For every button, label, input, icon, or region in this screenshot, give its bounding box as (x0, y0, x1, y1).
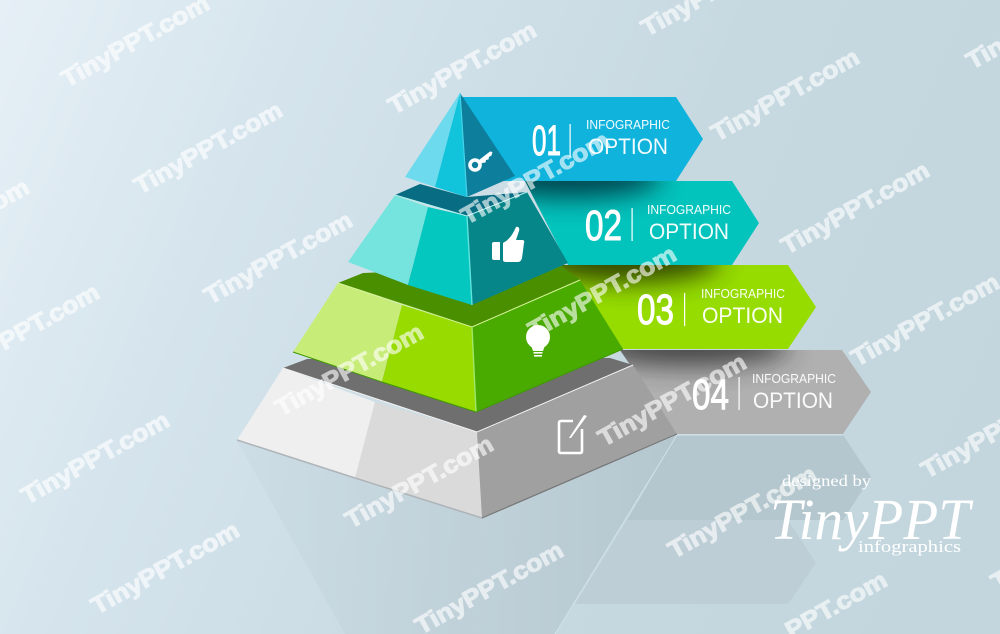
ribbon 4: 04 (692, 371, 729, 419)
ribbon 4: INFOGRAPHIC (752, 372, 836, 386)
icon: light bulb (526, 325, 550, 357)
ribbon 1: 01 (532, 117, 561, 165)
watermarks: TinyPPT.com (271, 319, 428, 422)
designer signature: designed by (782, 473, 871, 490)
watermarks: TinyPPT.com (847, 269, 1000, 372)
ribbon 4 (620, 350, 871, 434)
pyramid tier 2: teal (348, 184, 568, 305)
ribbon 1: OPTION (588, 134, 668, 159)
watermarks: TinyPPT.com (57, 0, 214, 93)
ribbon 3: OPTION (702, 303, 783, 328)
watermarks: TinyPPT.com (594, 349, 751, 452)
watermarks: TinyPPT.com (384, 17, 541, 120)
watermarks: TinyPPT.com (17, 407, 174, 510)
ribbon 1 (462, 97, 703, 181)
pyramid tier 1: blue top (405, 93, 515, 197)
ribbon 1: INFOGRAPHIC (586, 118, 670, 132)
watermarks: TinyPPT.com (524, 241, 681, 344)
ribbon 3: 03 (637, 286, 674, 334)
icon: key (470, 152, 492, 170)
ribbon 3: INFOGRAPHIC (701, 287, 785, 301)
floor reflection (237, 435, 871, 634)
ribbon 2 (525, 181, 759, 265)
ribbon 2: OPTION (649, 219, 729, 244)
watermarks: TinyPPT.com (457, 127, 614, 230)
watermarks: TinyPPT.com (777, 157, 934, 260)
watermarks: TinyPPT.com (707, 44, 864, 147)
pyramid tier 4: grey base (237, 358, 677, 518)
icon: note and pen (559, 415, 587, 453)
pyramid tier 3: green (293, 265, 623, 412)
ribbon 3 (561, 265, 816, 349)
ribbon 2: INFOGRAPHIC (647, 203, 731, 217)
watermarks: TinyPPT.com (87, 517, 244, 620)
designer signature: infographics (858, 537, 961, 556)
watermarks: TinyPPT.com (664, 461, 821, 564)
ribbon 2: 02 (585, 202, 622, 250)
watermarks: TinyPPT.com (341, 431, 498, 534)
watermarks: TinyPPT.com (200, 207, 357, 310)
icon: thumbs up (492, 227, 524, 262)
designer signature: TinyPPT (770, 487, 974, 552)
ribbon 4: OPTION (753, 388, 833, 413)
watermarks: TinyPPT.com (130, 97, 287, 200)
